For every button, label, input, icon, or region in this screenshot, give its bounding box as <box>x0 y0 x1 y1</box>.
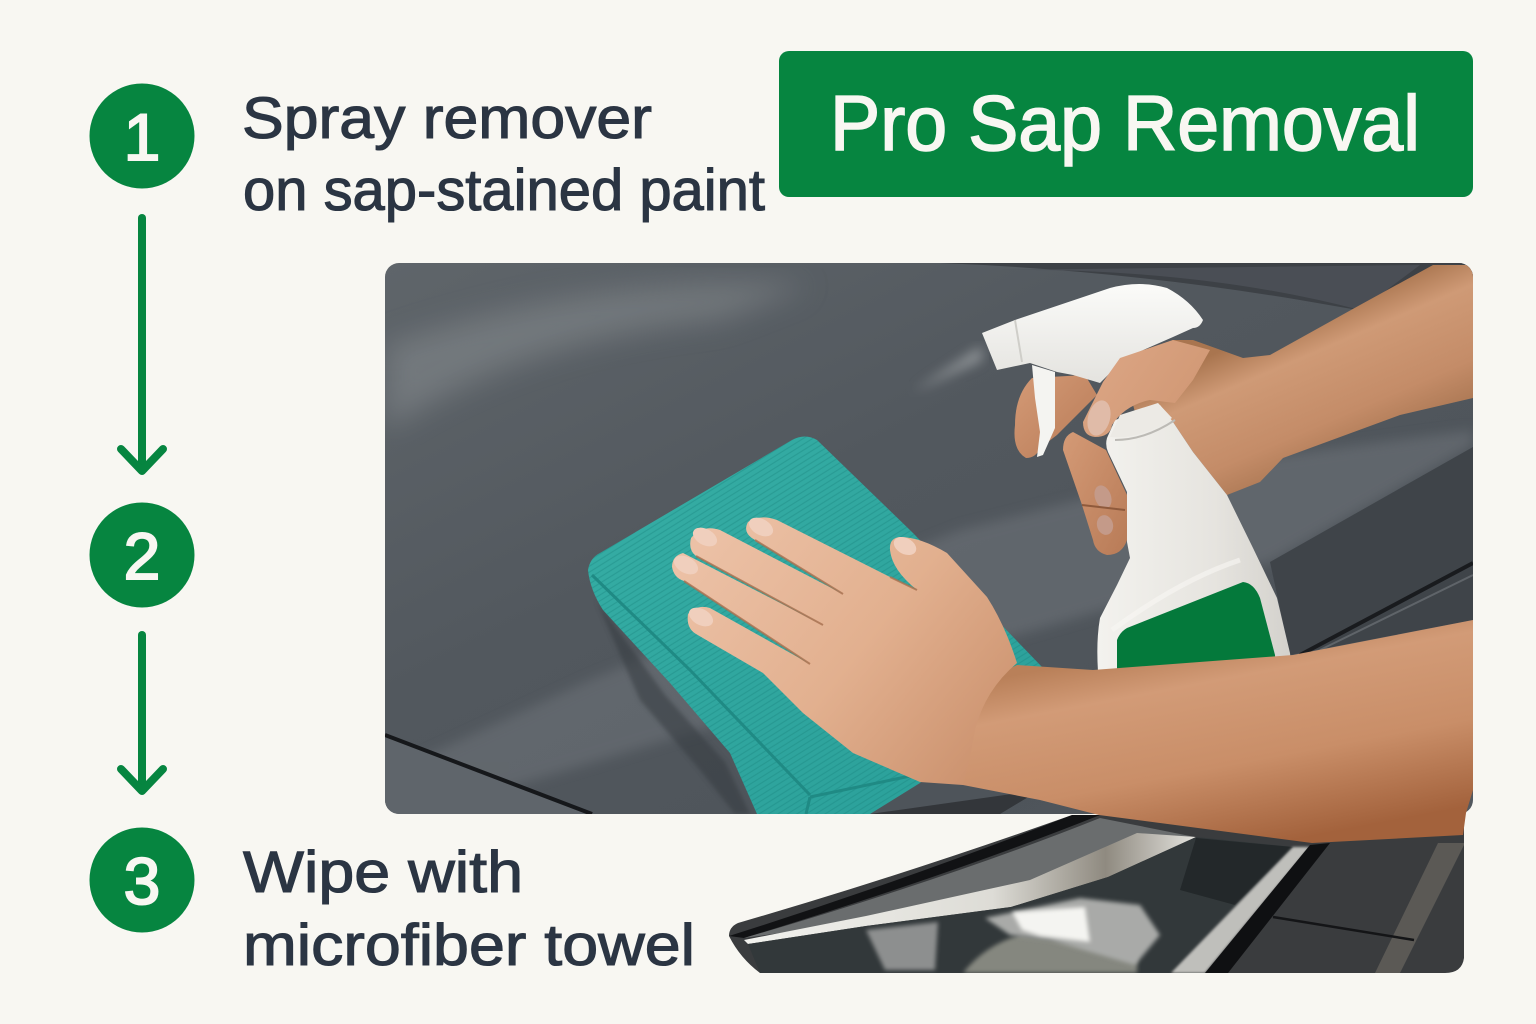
trigger <box>1032 365 1055 457</box>
step 3 text <box>243 840 695 978</box>
photo panel: car hood with towel and spray bottle <box>385 263 1473 814</box>
step marker 2 <box>90 502 194 608</box>
towel <box>588 436 1043 814</box>
step marker 3 <box>90 828 194 932</box>
hood surface <box>385 263 1473 814</box>
arrow: step 2 to step 3 <box>121 635 163 791</box>
step 1 text: on sap-stained paint <box>243 158 765 223</box>
headlight and car front <box>725 810 1470 975</box>
spray bottle <box>1097 403 1292 672</box>
title banner: Pro Sap Removal <box>830 79 1420 167</box>
arrow: step 1 to step 2 <box>121 218 163 471</box>
curled fingers <box>1063 432 1127 555</box>
index finger behind trigger <box>1014 375 1097 458</box>
step marker 1 <box>90 84 194 188</box>
spray mist <box>923 344 987 388</box>
title banner <box>779 51 1473 197</box>
spray head <box>982 284 1203 383</box>
step 1 text <box>242 86 765 223</box>
step marker 1: 1 <box>124 100 160 174</box>
forearm on towel <box>954 620 1473 843</box>
step marker 2: 2 <box>124 519 160 593</box>
thumb <box>1083 340 1210 438</box>
step marker 3: 3 <box>124 844 160 918</box>
step 3 text: Wipe with <box>243 840 523 905</box>
gripping arm and palm <box>1120 265 1473 495</box>
step 3 text: microfiber towel <box>243 913 695 978</box>
step 1 text: Spray remover <box>242 86 652 151</box>
hand on towel <box>671 514 1017 785</box>
